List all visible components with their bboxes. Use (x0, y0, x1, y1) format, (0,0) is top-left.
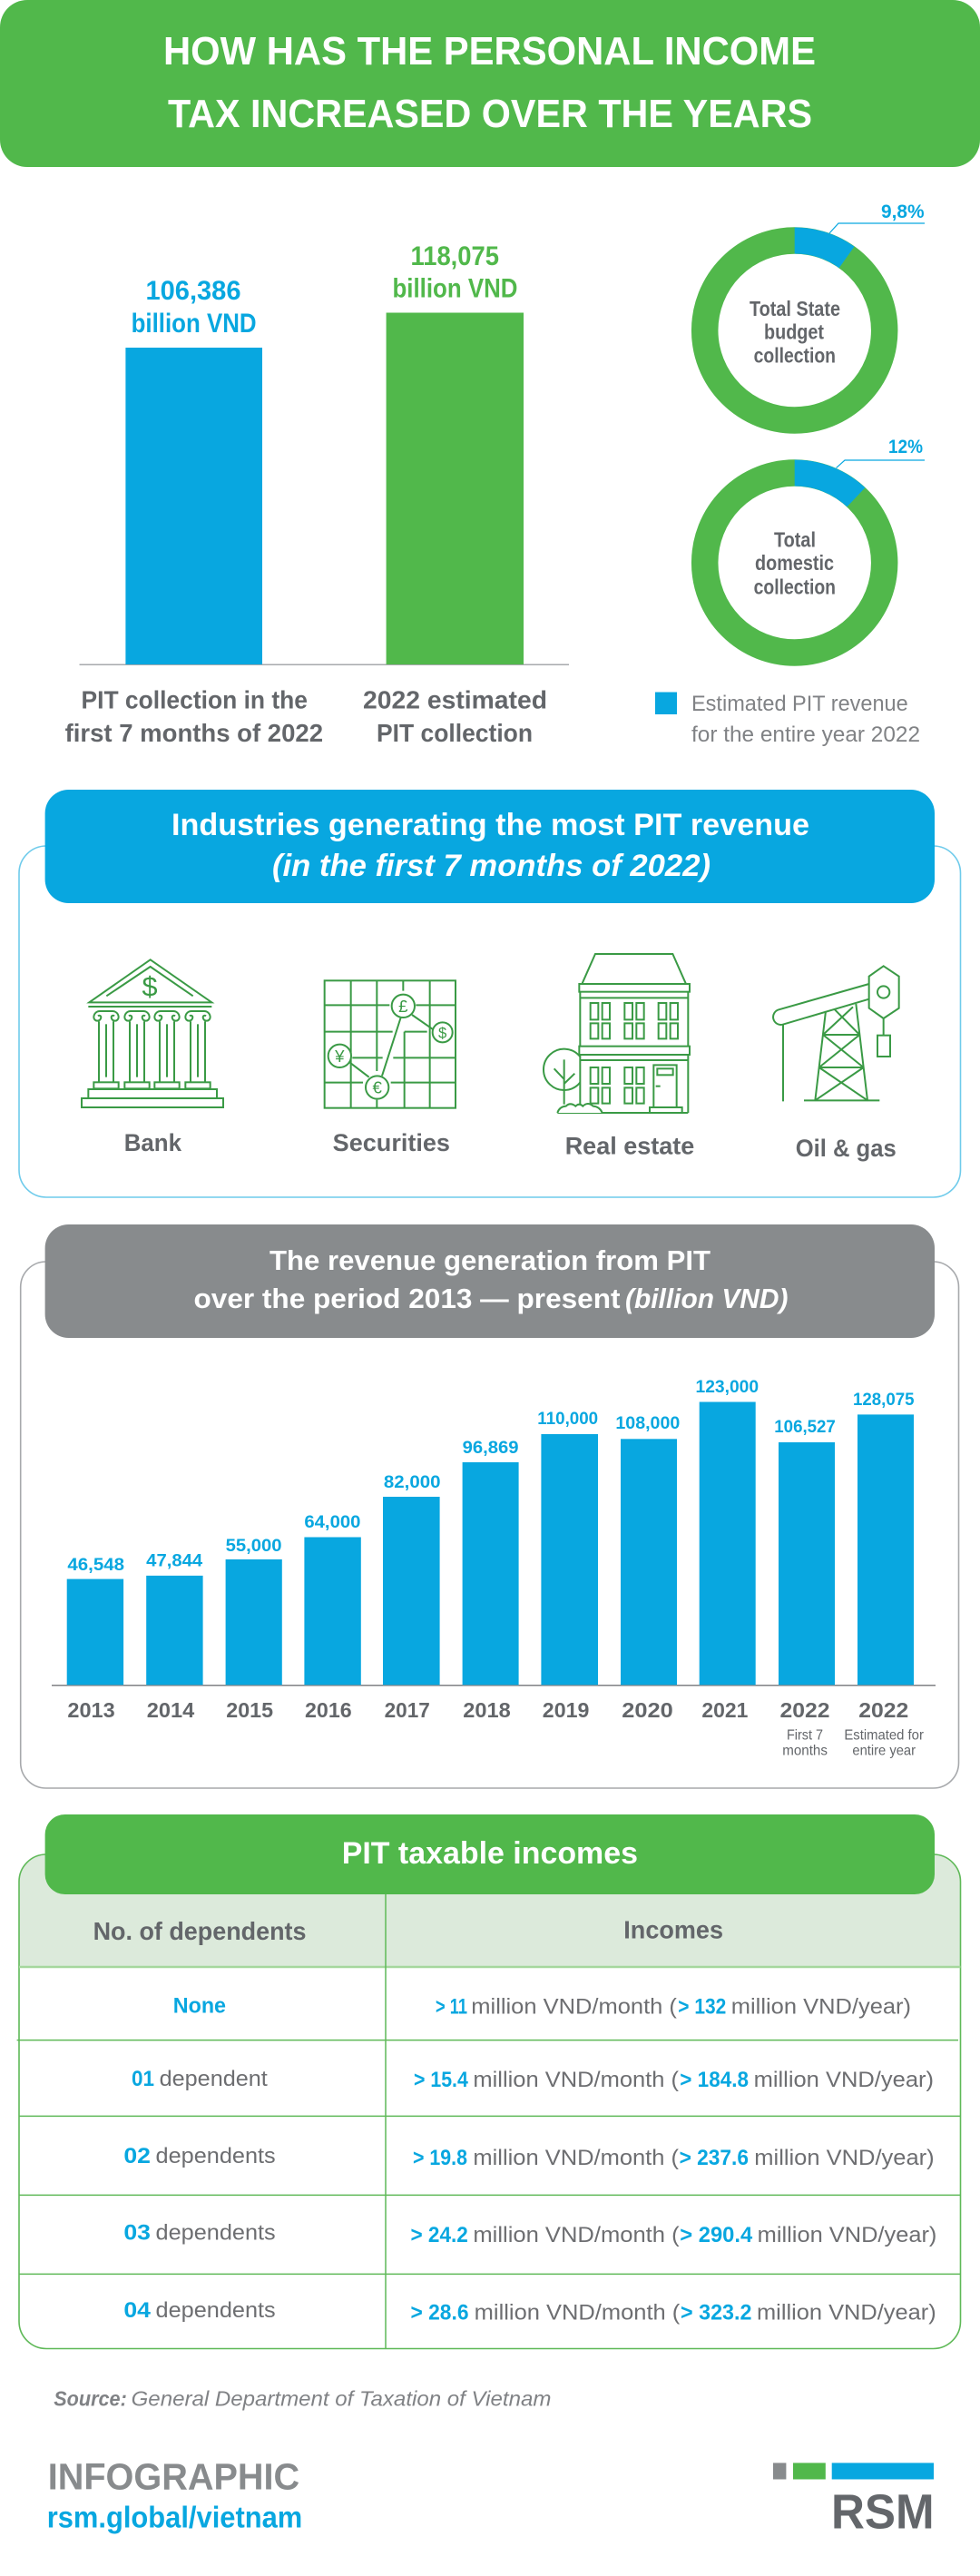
panel heading: revenue generation: over the period 2013 — present (194, 1283, 621, 1314)
donut chart: total domestic collection: domestic (755, 551, 834, 575)
row: none (173, 1993, 911, 2019)
2022 sub-labels: Estimated for (844, 1728, 925, 1744)
source note: General Department of Taxation of Vietnam (132, 2387, 551, 2411)
bar value labels: 47,844 (146, 1552, 203, 1571)
panel: revenue generation from PIT (21, 1224, 959, 1788)
bar chart: PIT collection comparison (65, 241, 569, 747)
year labels: 2015 (226, 1698, 273, 1722)
row: 03 dependents: million VND/month ( (473, 2223, 680, 2247)
bar value labels: 106,527 (774, 1418, 836, 1437)
table column headers: Incomes (623, 1915, 723, 1943)
row: 04 dependents: million VND/month ( (475, 2300, 680, 2325)
bar: first 7 months of 2022: PIT collection in the (82, 686, 308, 714)
row: 02 dependents: > 237.6 (680, 2146, 749, 2170)
row: 01 dependent: million VND/year) (754, 2068, 934, 2092)
row: 01 dependent: > 15.4 (414, 2068, 468, 2092)
row: 04 dependents (123, 2298, 936, 2325)
donut chart: total state budget collection: Total State (750, 297, 840, 320)
label: bank: Bank (124, 1129, 182, 1156)
row: 03 dependents (123, 2221, 936, 2247)
year labels: 2014 (147, 1698, 194, 1722)
row: 03 dependents: > 290.4 (680, 2223, 753, 2247)
donut chart: total domestic collection: 12% (888, 437, 923, 457)
bar: 2022 estimated: 118,075 (410, 241, 499, 271)
bar value labels: 46,548 (67, 1556, 124, 1575)
year labels: 2022 (858, 1698, 908, 1722)
row: none: > 11 (436, 1995, 467, 2019)
title text: HOW HAS THE PERSONAL INCOME (163, 29, 816, 74)
row: 03 dependents: million VND/year) (758, 2223, 936, 2247)
title text: TAX INCREASED OVER THE YEARS (168, 92, 812, 136)
bar: first 7 months of 2022: first 7 months of 2022 (65, 719, 323, 747)
row: 01 dependent: 01 (132, 2067, 154, 2091)
donut chart: total domestic collection: Total (774, 527, 816, 551)
bar value labels: 55,000 (226, 1537, 282, 1556)
row: 02 dependents: million VND/year) (754, 2146, 935, 2170)
bar value labels: 110,000 (537, 1410, 598, 1429)
footer: infographic label and URL: rsm.global/vietnam (47, 2500, 302, 2534)
row: 03 dependents: > 24.2 (410, 2223, 468, 2247)
row: 04 dependents: > 28.6 (410, 2300, 468, 2325)
panel heading: industries: (in the first 7 months of 2022) (272, 849, 710, 883)
legend: estimated PIT revenue: Estimated PIT revenue (691, 692, 908, 716)
2022 sub-labels (782, 1728, 925, 1759)
bar: 2022 estimated: 2022 estimated (363, 686, 547, 714)
year labels: 2016 (305, 1698, 352, 1722)
year labels: 2022 (780, 1698, 829, 1722)
panel heading: PIT taxable incomes (45, 1814, 935, 1894)
bar value labels: 64,000 (304, 1513, 360, 1532)
bar: 2022 estimated (363, 241, 547, 747)
row: 01 dependent: > 184.8 (680, 2068, 749, 2092)
panel: PIT taxable incomes table (17, 1814, 961, 2349)
bar: first 7 months of 2022: billion VND (132, 309, 257, 339)
logo: RSM (773, 2463, 935, 2540)
donut chart: total domestic collection: collection (754, 575, 836, 598)
2022 sub-labels: entire year (852, 1743, 916, 1759)
title banner (0, 0, 980, 167)
row: 02 dependents: million VND/month ( (473, 2146, 679, 2170)
table column headers: No. of dependents (93, 1917, 306, 1945)
footer: infographic label and URL (47, 2456, 302, 2534)
2022 sub-labels: months (782, 1743, 828, 1759)
title text (163, 29, 816, 136)
year labels: 2017 (385, 1698, 430, 1722)
bars (67, 1401, 914, 1685)
year labels: 2013 (67, 1698, 115, 1722)
row: 01 dependent: million VND/month ( (473, 2068, 679, 2092)
icon: securities (325, 980, 456, 1108)
label: oil and gas: Oil & gas (796, 1135, 897, 1162)
row: none: million VND/year) (731, 1995, 911, 2019)
icon: securities: ¥ (334, 1047, 345, 1066)
year labels: 2020 (622, 1698, 673, 1722)
row: 03 dependents: dependents (156, 2221, 276, 2246)
panel heading: industries: Industries generating the most PIT revenue (172, 808, 809, 842)
panel heading: revenue generation: The revenue generation from PIT (270, 1244, 710, 1276)
row: none: million VND/month ( (471, 1995, 677, 2019)
row: 04 dependents: > 323.2 (681, 2300, 751, 2325)
label: real estate: Real estate (565, 1133, 694, 1160)
source note: Source: (54, 2387, 127, 2411)
icon: bank: $ (142, 971, 158, 1002)
icon: securities: £ (398, 997, 408, 1016)
row: 04 dependents: 04 (123, 2298, 152, 2323)
bar chart: PIT revenue by year (52, 1378, 936, 1759)
icon: oil and gas pump (773, 966, 899, 1101)
bar value labels: 108,000 (615, 1414, 680, 1433)
bar: first 7 months of 2022: 106,386 (145, 276, 241, 306)
panel heading: revenue generation (45, 1224, 935, 1338)
icon: bank (82, 959, 223, 1107)
icon: securities: $ (438, 1025, 446, 1042)
bar value labels: 96,869 (463, 1439, 519, 1458)
year labels: 2019 (543, 1698, 589, 1722)
row: 04 dependents: dependents (156, 2298, 276, 2323)
bar: first 7 months of 2022 (65, 276, 323, 747)
row: none: None (173, 1993, 226, 2019)
panel heading: industries (45, 790, 935, 903)
bar: 2022 estimated: billion VND (392, 274, 517, 303)
panel heading: PIT taxable incomes: PIT taxable incomes (342, 1836, 638, 1871)
2022 sub-labels: First 7 (787, 1728, 823, 1744)
row: 01 dependent (132, 2067, 934, 2092)
panel heading: revenue generation: (billion VND) (625, 1283, 788, 1314)
donut chart: total state budget collection (705, 202, 925, 420)
year labels (67, 1698, 908, 1722)
row: 02 dependents: dependents (156, 2144, 276, 2168)
row: 03 dependents: 03 (123, 2221, 151, 2246)
bar value labels (67, 1378, 915, 1575)
bar: 2022 estimated: PIT collection (377, 719, 533, 747)
table column headers (93, 1915, 723, 1945)
label: securities: Securities (333, 1129, 450, 1156)
year labels: 2021 (701, 1698, 749, 1722)
row: 04 dependents: million VND/year) (757, 2300, 936, 2325)
donut chart: total state budget collection: collection (754, 343, 836, 367)
bar value labels: 128,075 (853, 1391, 915, 1410)
row: 02 dependents (123, 2144, 935, 2170)
donut chart: total state budget collection: 9,8% (881, 202, 925, 222)
footer: infographic label and URL: INFOGRAPHIC (48, 2456, 299, 2498)
row: none: > 132 (678, 1995, 726, 2019)
icon: securities: € (372, 1078, 382, 1097)
donut chart: total domestic collection (705, 437, 925, 653)
icon: real estate (544, 954, 690, 1113)
legend: estimated PIT revenue (655, 692, 920, 747)
bar value labels: 123,000 (695, 1378, 759, 1397)
logo: RSM: RSM (831, 2485, 935, 2540)
donut chart: total state budget collection: budget (764, 320, 824, 343)
row: 01 dependent: dependent (160, 2067, 268, 2091)
row: 02 dependents: > 19.8 (413, 2146, 467, 2170)
panel: industries generating the most PIT revenue (19, 790, 960, 1197)
year labels: 2018 (463, 1698, 511, 1722)
row: 02 dependents: 02 (123, 2144, 151, 2168)
legend: estimated PIT revenue: for the entire year 2022 (691, 723, 920, 747)
bar value labels: 82,000 (384, 1473, 441, 1492)
